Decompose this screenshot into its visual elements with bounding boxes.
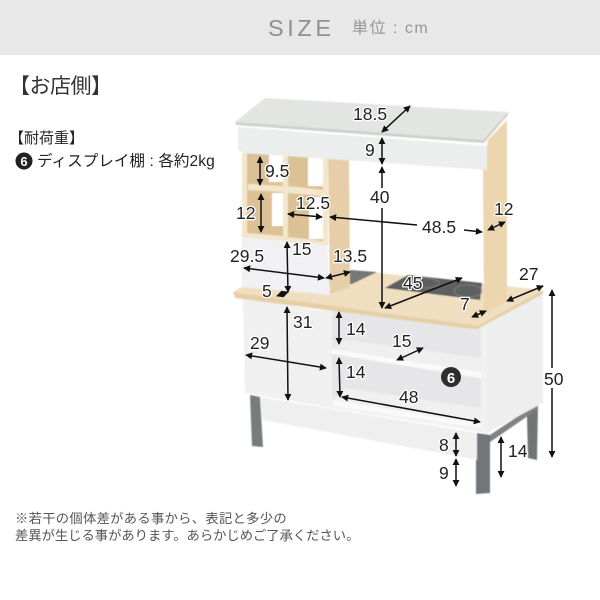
dimension: box 29.5 [230,246,324,278]
dimension: depth 27: 27 [519,264,538,284]
roof top [235,98,508,140]
dimension: lower opening 14: 14 [346,362,366,382]
dimension: drawer 31 [287,307,312,400]
leg crossbar [490,403,538,442]
dimension: counter 45: 45 [403,273,422,293]
dimension: shelf depth 15: 15 [392,331,411,351]
back right leg [527,403,538,460]
dimension: fascia 9: 9 [365,140,375,160]
cabinet front frame [320,310,487,433]
dimension: shelf depth 15 [392,331,423,360]
cabinet right side [487,292,543,433]
shelf marker 6 [441,367,461,387]
dimension: shelf width 48 [342,387,480,422]
footnote: ※若干の個体差がある事から、表記と多少の [15,511,287,526]
dimension: width 48.5 [330,217,482,237]
shelf marker 6: 6 [447,370,455,387]
dimension: counter 45 [385,273,462,308]
dimension: shelf 12: 12 [236,203,255,223]
main hob [385,275,482,300]
lower front rail [260,397,477,460]
hood fascia [238,127,487,170]
load capacity note: 【耐荷重】 [9,130,84,147]
dimension: upper opening 14: 14 [346,319,366,339]
dimension: side 13.5 [326,246,367,278]
dimension: leg 14: 14 [508,441,528,461]
dimension: total height 50: 50 [544,369,564,389]
unit label: 単位 : cm [352,19,429,37]
dimension: shelf width 48: 48 [399,387,418,407]
dimension: height 40: 40 [370,187,390,207]
dimension: post 12 [488,199,513,230]
left shelf unit back [243,150,326,246]
dimension: clearance 9: 9 [439,463,449,483]
dimension: shelf 12.5: 12.5 [296,193,330,213]
section heading: 【お店側】 [9,75,112,98]
right post [483,120,507,314]
dimension: shelf 9.5 [260,157,289,185]
shelf side panel [328,155,350,294]
drawer panel [243,298,328,407]
roof edge [235,112,508,143]
dimension: ledge 7: 7 [460,294,470,314]
counter top [233,270,543,326]
shelf openings [269,150,323,239]
dimension: fascia 9 [365,138,382,164]
dimension: lower opening 14 [339,358,366,397]
dimension: box 29.5: 29.5 [230,246,264,266]
header title: SIZE [268,15,335,41]
dimension: roof depth 18.5 [353,104,410,132]
dimension: box 15 [287,239,311,292]
small hob [350,270,377,284]
dimension: leg 14 [501,437,528,477]
dimension: width 48.5: 48.5 [422,217,456,237]
dimension: drawer 31: 31 [293,312,312,332]
dimension: shelf 12 [236,194,261,232]
dimension: rail 8 [439,433,456,456]
footnote: 差異が生じる事があります。あらかじめご了承ください。 [15,528,359,543]
dimension: shelf 9.5: 9.5 [265,161,289,181]
dimension: side 13.5: 13.5 [333,246,367,266]
dimension: rail 8: 8 [439,435,449,455]
dimension: depth 27 [507,264,543,301]
dimension: ledge 5 [262,281,288,301]
dimension: box 15: 15 [292,239,311,259]
dimension: drawer 29 [246,333,326,368]
dimension: drawer 29: 29 [250,333,269,353]
dimension: roof depth 18.5: 18.5 [353,104,387,124]
cabinet interior [332,308,481,424]
dimension: ledge 7 [460,294,486,317]
upper display shelf [332,340,481,378]
counter front edge [233,290,543,329]
header band [0,0,600,55]
footnote [15,511,359,543]
product illustration: kitchen shop counter [233,98,543,494]
lower display shelf [333,388,481,428]
dimension: post 12: 12 [494,199,513,219]
front drawer box [242,237,330,295]
load capacity note: 6 [20,154,28,169]
dimension: upper opening 14 [339,312,366,344]
front right leg [476,433,490,494]
dimension: clearance 9 [439,459,456,486]
dimension: shelf 12.5 [288,193,330,217]
load capacity note: ディスプレイ棚 : 各約2kg [37,151,215,170]
shelf frame edges [242,150,328,247]
load capacity note [9,130,215,170]
dimension: ledge 5: 5 [262,281,272,301]
left leg [250,395,263,447]
